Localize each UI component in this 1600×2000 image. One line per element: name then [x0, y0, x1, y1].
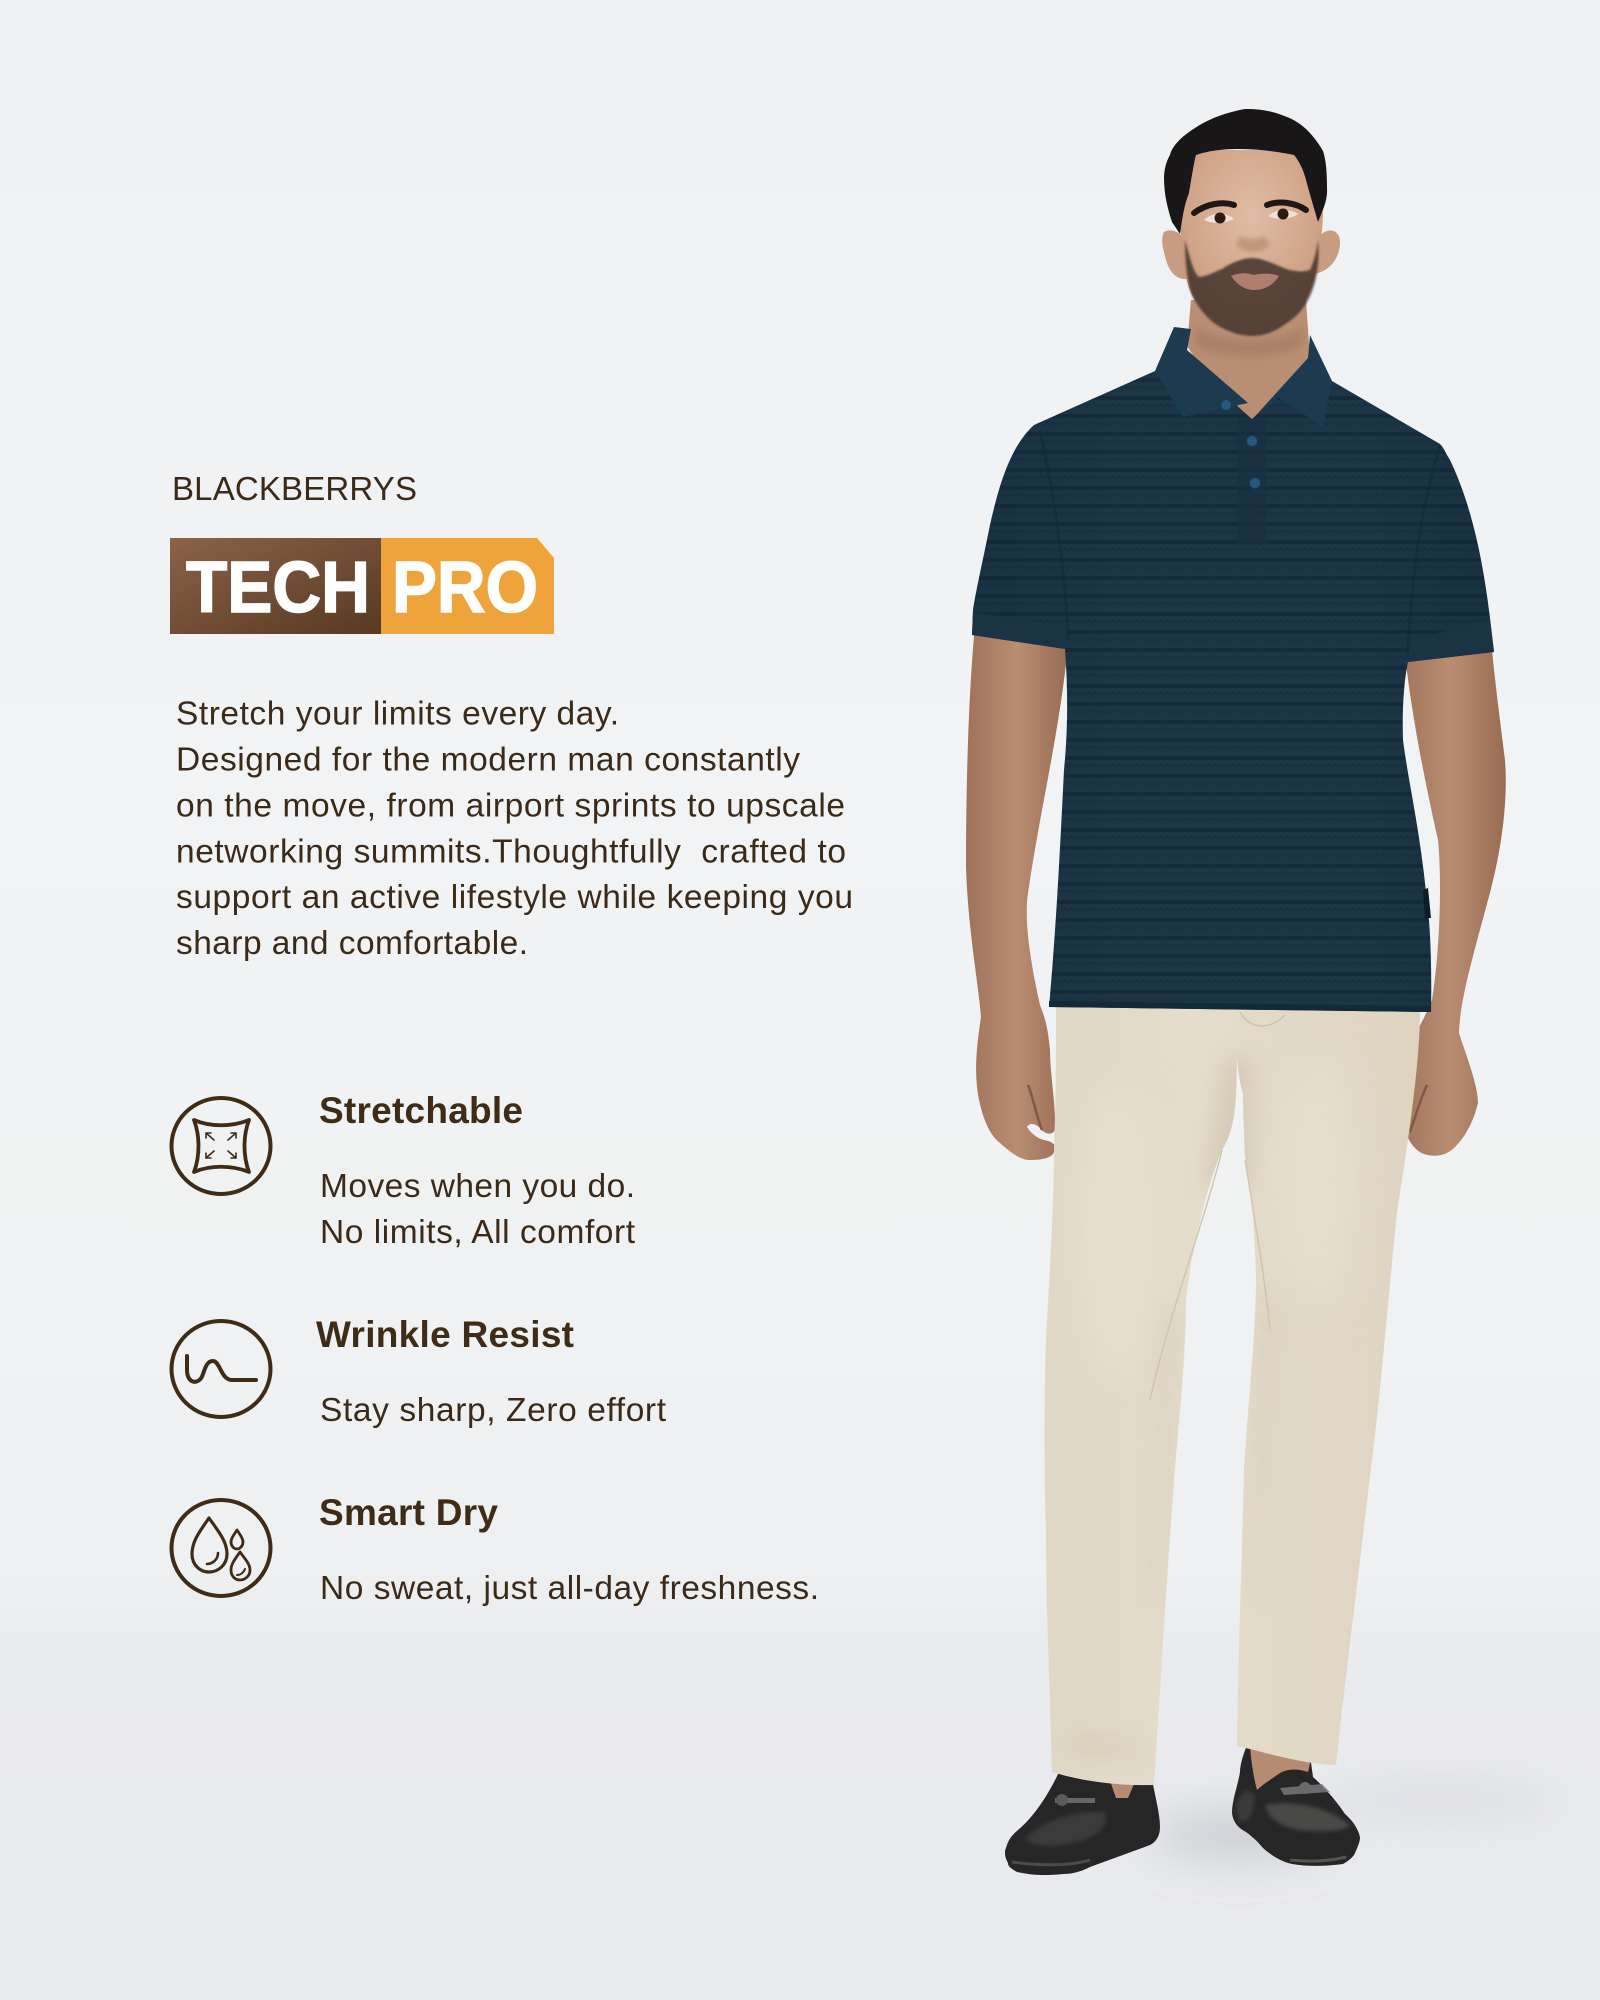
sleeve cuffs [972, 612, 1067, 649]
beige trousers [1044, 1005, 1420, 1785]
right arm and hand [1396, 650, 1506, 1156]
right shoe highlights [1265, 1803, 1350, 1831]
feature: wrinkle resist [172, 1314, 667, 1429]
beard [1185, 240, 1319, 336]
left shoe highlights [1025, 1812, 1106, 1846]
intro paragraph [176, 696, 853, 962]
description: wrinkle resist: Stay sharp, Zero effort [320, 1392, 667, 1429]
intro paragraph: Stretch your limits every day. [176, 696, 619, 732]
description: stretchable: No limits, All comfort [320, 1214, 636, 1251]
right ankle [1250, 1745, 1312, 1790]
hem band [1049, 1001, 1431, 1012]
intro paragraph: on the move, from airport sprints to upscale [176, 788, 845, 824]
heading: wrinkle resist: Wrinkle Resist [316, 1314, 574, 1355]
left shoe [1005, 1770, 1160, 1875]
intro paragraph: support an active lifestyle while keeping you [176, 879, 853, 916]
nose [1236, 236, 1270, 252]
polo shirt [972, 360, 1494, 1012]
ears [1162, 230, 1340, 279]
description: stretchable [320, 1168, 636, 1251]
floor shadows [1150, 1786, 1560, 1857]
ankle left [1108, 1775, 1138, 1798]
feature: smart dry [172, 1492, 819, 1607]
heading: smart dry: Smart Dry [319, 1492, 498, 1533]
side tag [1423, 888, 1431, 918]
description: stretchable: Moves when you do. [320, 1168, 635, 1205]
neck [1187, 300, 1310, 419]
model figure [966, 109, 1560, 1875]
hair [1164, 109, 1327, 234]
eyes and brows [1194, 203, 1306, 224]
collar [1155, 327, 1332, 427]
logo: tech pro: TECH [186, 548, 370, 628]
face [1180, 150, 1323, 336]
heading: stretchable: Stretchable [319, 1090, 523, 1131]
right shoe [1232, 1745, 1360, 1866]
buttons [1220, 400, 1260, 488]
logo: tech pro [170, 538, 554, 634]
infographic page [170, 109, 1580, 1907]
brand name: BLACKBERRYS [172, 470, 417, 507]
icon: stretch fabric [172, 1098, 270, 1194]
sleeve seams [1040, 430, 1440, 655]
description: smart dry: No sweat, just all-day freshness. [320, 1570, 819, 1607]
logo: tech pro: PRO [392, 548, 538, 628]
icon: water drops [172, 1500, 270, 1596]
trouser shading [1087, 1060, 1324, 1753]
left arm and hand [966, 625, 1068, 1160]
icon: wrinkle line [172, 1321, 270, 1417]
lips [1231, 273, 1279, 290]
intro paragraph: sharp and comfortable. [176, 925, 528, 962]
intro paragraph: networking summits.Thoughtfully crafted to [176, 834, 846, 870]
placket [1237, 419, 1266, 545]
feature: stretchable [172, 1090, 636, 1251]
intro paragraph: Designed for the modern man constantly [176, 742, 800, 778]
